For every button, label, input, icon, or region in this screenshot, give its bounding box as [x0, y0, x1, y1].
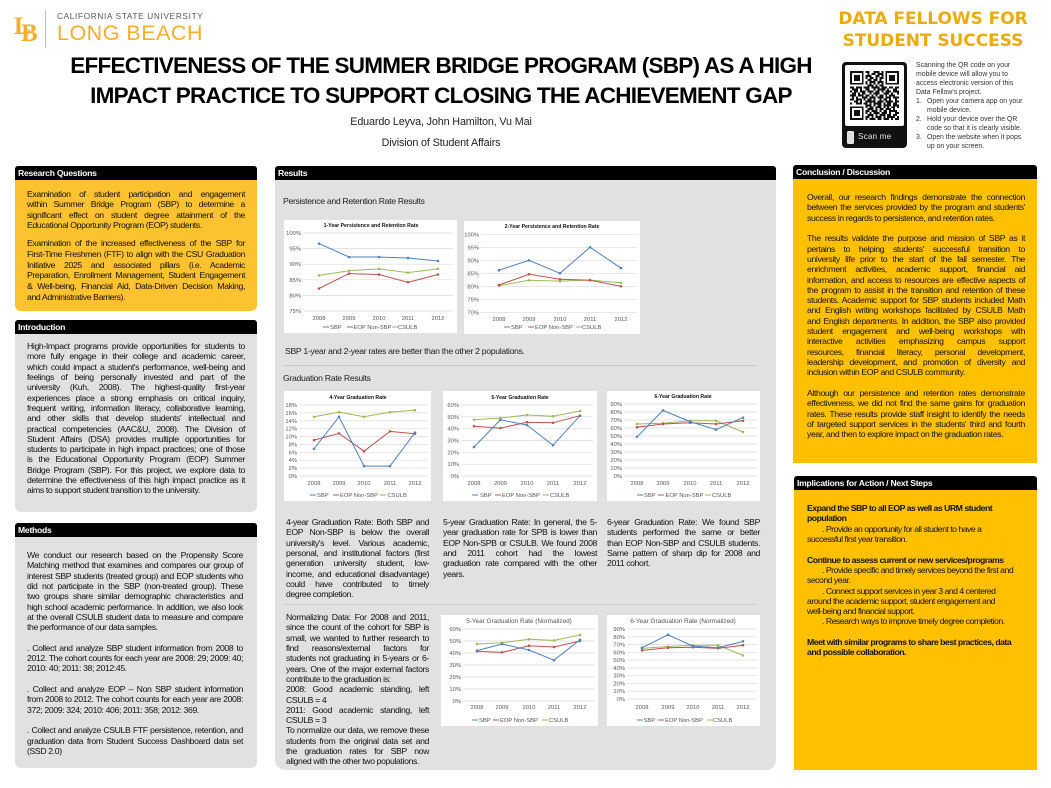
chart: 4-year graduation rate: 18% — [285, 403, 297, 409]
heading: conclusion: Conclusion / Discussion — [796, 167, 890, 177]
chart: 5-year graduation rate: 5-Year Graduation Rate — [491, 395, 549, 401]
chart: 1-year persistence and retention rate: SBP — [330, 325, 342, 331]
chart: 5-year graduation rate normalized: 2011 — [548, 705, 560, 711]
heading: implications — [794, 476, 1037, 490]
heading: introduction — [15, 320, 257, 334]
text: implications body: Continue to assess current or new services/programs — [807, 555, 1004, 565]
chart: 5-year graduation rate normalized — [441, 615, 598, 726]
text: methods body: 2010: 40; 2011: 38; 2012:45. — [27, 663, 127, 673]
text: introduction body: Student Affairs (DSA) provides multiple opportunities for — [27, 434, 245, 444]
chart: 4-year graduation rate: EOP Non-SBP — [340, 493, 378, 499]
text: conclusion body: university life prior to the start of the fall semester. The — [807, 254, 1025, 264]
division: Division of Student Affairs — [382, 137, 500, 149]
chart: 2-year persistence and retention rate: 70% — [467, 310, 479, 316]
chart: 5-year graduation rate: CSULB — [550, 493, 569, 499]
text: research question two: Examination of the increased effectiveness of the SBP for — [27, 238, 245, 248]
chart: 6-year graduation rate normalized: SBP — [644, 718, 655, 724]
text: normalizing data: To normalize our data, we remove these — [286, 725, 429, 735]
text: 4-year graduation finding — [286, 517, 430, 599]
chart: 4-year graduation rate: 12% — [285, 427, 297, 433]
chart: 6-year graduation rate: 2011 — [710, 481, 722, 487]
chart: 6-year graduation rate: 30% — [610, 450, 622, 456]
chart: 5-year graduation rate normalized: 40% — [449, 651, 461, 657]
text: conclusion body: rates. These results provide staff insight to identify the needs — [807, 409, 1025, 419]
text: normalizing data: since the count of the cohort for SBP is — [286, 622, 429, 632]
text: normalizing data: 2008: Good academic standing, left — [286, 684, 429, 694]
chart: 6-year graduation rate: 50% — [610, 434, 622, 440]
text: methods body: . Collect and analyze SBP student information from 2008 to — [27, 643, 243, 653]
text: implications body: Expand the SBP to all EOP as well as URM student — [807, 503, 992, 513]
text: conclusion body: between the services provided by the program and students' — [807, 202, 1025, 212]
chart: 1-year persistence and retention rate: CSULB — [398, 325, 417, 331]
heading: introduction: Introduction — [18, 322, 65, 332]
chart: 5-year graduation rate normalized: 2010 — [523, 705, 535, 711]
text: conclusion body: interactive activities emphasizing campus support — [807, 336, 1025, 346]
chart: 4-year graduation rate: 10% — [285, 435, 297, 441]
QR instructions: Data Fellow's project. — [916, 89, 982, 96]
text: normalizing data: students not graduating in 5-years or 6- — [286, 653, 429, 663]
text: introduction body: is the Educational Opportunity Program (EOP) Summer — [27, 454, 245, 464]
text: introduction body: High-Impact programs provide opportunities for students to — [27, 341, 245, 351]
text: methods body: two groups share similar demographic characteristics and — [27, 591, 243, 601]
chart: 5-year graduation rate normalized: 60% — [449, 627, 461, 633]
text: 4-year graduation finding: 4-year Graduation Rate: Both SBP and — [286, 517, 429, 527]
chart: 1-year persistence and retention rate: 2009 — [343, 316, 355, 322]
chart: 5-year graduation rate: 60% — [447, 403, 459, 409]
text: methods body: We conduct our research based on the Propensity Score — [27, 550, 243, 560]
text: research question two: First-Time Freshmen (FTF) to align with the CSU Graduation — [27, 249, 245, 259]
chart: 4-year graduation rate — [284, 391, 431, 501]
chart: 6-year graduation rate: CSULB — [712, 493, 731, 499]
chart: 5-year graduation rate: 0% — [451, 474, 459, 480]
QR instructions — [916, 62, 1022, 150]
text: implications body: . Research ways to improve timely degree completion. — [822, 616, 1005, 626]
chart: 6-year graduation rate: 90% — [610, 402, 622, 408]
icon: LB monogram — [14, 13, 38, 45]
text: normalizing data: small, we wanted to further research to — [286, 633, 429, 643]
text: 4-year graduation finding: personal, and institutional factors (first — [286, 548, 429, 558]
panel: results — [275, 166, 776, 770]
text: research question two: Initiative 2025 and associated pillars (i.e. Academic — [27, 260, 245, 270]
chart: 4-year graduation rate: 0% — [289, 474, 297, 480]
chart: 4-year graduation rate: 14% — [285, 419, 297, 425]
heading: results: Results — [278, 168, 307, 178]
text: conclusion body: effectiveness, we did not find the same gains for graduation — [807, 398, 1025, 408]
title: EFFECTIVENESS OF THE SUMMER BRIDGE PROGRAM (SBP) AS A HIGH — [70, 53, 812, 78]
panel: introduction — [15, 320, 257, 512]
chart: 5-year graduation rate normalized: CSULB — [549, 718, 568, 724]
text: introduction body: experiences place a strong emphasis on critical inquiry, — [27, 393, 245, 403]
text: normalizing data: aligned with the other two populations. — [286, 756, 419, 766]
text: methods body: from 2008 to 2012. The cohort counts for each year are 2008: — [27, 694, 243, 704]
text: persistence finding: SBP 1-year and 2-year rates are better than the other 2 populations. — [285, 346, 525, 356]
chart: 4-year graduation rate: 2011 — [384, 481, 396, 487]
text: conclusion body: inclusion within EOP and CSULB community. — [807, 367, 965, 377]
text: introduction body: university (Kuh, 2008). The highest-quality first-year — [27, 382, 245, 392]
text: conclusion body: students. Academic support for SBP students included Math — [807, 295, 1025, 305]
chart: 2-year persistence and retention rate: EOP Non-SBP — [535, 325, 573, 331]
chart: 5-year graduation rate normalized: 20% — [449, 675, 461, 681]
heading: conclusion — [793, 165, 1037, 179]
chart: 4-year graduation rate: 4% — [289, 458, 297, 464]
text: 6-year graduation finding: 2011 cohort. — [607, 558, 650, 568]
chart: 5-year graduation rate normalized: SBP — [479, 718, 491, 724]
chart: 4-year graduation rate: 2010 — [358, 481, 370, 487]
program heading: Data Fellows for Student Success: DATA FELLOWS FOR — [838, 9, 1028, 29]
chart: 6-year graduation rate normalized: 2008 — [636, 705, 648, 711]
chart: 4-year graduation rate: 16% — [285, 411, 297, 417]
university name: CALIFORNIA STATE UNIVERSITY — [57, 12, 203, 21]
QR instructions: mobile device. — [927, 107, 971, 114]
chart: 2-year persistence and retention rate: 2012 — [615, 317, 627, 323]
chart: 5-year graduation rate: 2011 — [547, 481, 559, 487]
heading: research questions — [15, 166, 257, 180]
chart: 1-year persistence and retention rate: 2012 — [432, 316, 444, 322]
text: conclusion body: resources, financial literacy, personal development, — [807, 347, 1025, 357]
text: 6-year graduation finding: 6-year Graduation Rate: We found SBP — [607, 517, 760, 527]
chart: 6-year graduation rate: 6-Year Graduation Rate — [654, 394, 712, 400]
chart: 1-year persistence and retention rate: EOP Non-SBP — [354, 325, 392, 331]
chart: 6-year graduation rate: 0% — [614, 474, 622, 480]
text: 5-year graduation finding: year graduation rate for SPB is lower than — [443, 527, 597, 537]
text: research question one: Educational Opportunity Program (EOP) students. — [27, 220, 202, 230]
text: conclusion body: and English departments. In addition, the SBP also provided — [807, 316, 1025, 326]
heading: results — [275, 166, 776, 180]
chart: 6-year graduation rate normalized: 2011 — [712, 705, 724, 711]
chart: 4-year graduation rate: SBP — [317, 493, 329, 499]
QR instructions: up on your screen. — [927, 143, 984, 150]
chart: 5-year graduation rate normalized: 2008 — [471, 705, 483, 711]
text: methods body: . Collect and analyze EOP – Non SBP student information — [27, 684, 243, 694]
chart: 6-year graduation rate normalized: 80% — [613, 635, 625, 641]
chart: 6-year graduation rate normalized: CSULB — [713, 718, 732, 724]
chart: 5-year graduation rate normalized: 10% — [449, 687, 461, 693]
text: 4-year graduation finding: generation university student, low- — [286, 558, 429, 568]
chart: 2-year persistence and retention rate: 2-Year Persistence and Retention Rate — [505, 224, 600, 230]
chart: 2-year persistence and retention rate: CSULB — [582, 325, 601, 331]
chart: 2-year persistence and retention rate: SBP — [511, 325, 523, 331]
authors: Eduardo Leyva, John Hamilton, Vu Mai — [350, 116, 532, 128]
text: conclusion body: pertains to helping students' successful transition to — [807, 244, 1025, 254]
text: conclusion body: the program to assist in the transition and retention of these — [807, 285, 1025, 295]
text: research question two: & Well-being, Financial Aid, Data-Driven Decision Making, — [27, 281, 245, 291]
chart: 6-year graduation rate normalized: 0% — [617, 697, 625, 703]
chart: 4-year graduation rate: 2009 — [333, 481, 345, 487]
text: conclusion body: year, and then to explore impact on the graduation rates. — [807, 429, 1003, 439]
chart: 5-year graduation rate normalized: 0% — [453, 699, 461, 705]
QR instructions: 2. — [916, 116, 922, 123]
chart: 6-year graduation rate: 2008 — [631, 481, 643, 487]
subheading: persistence and retention: Persistence and Retention Rate Results — [283, 196, 425, 206]
chart: 5-year graduation rate normalized: 2009 — [496, 705, 508, 711]
text: introduction body: aims to support student transition to the university. — [27, 485, 200, 495]
text: implications body: population — [807, 513, 846, 523]
text: conclusion body: student engagement and well-being workshops with — [807, 326, 1025, 336]
chart: 6-year graduation rate normalized: 20% — [613, 681, 625, 687]
text: methods body: 2012. The cohort counts for each year are 2008: 29; 2009: 40; — [27, 653, 243, 663]
panel: conclusion and discussion — [793, 165, 1037, 463]
chart: 1-year persistence and retention rate: 75% — [289, 309, 301, 315]
chart: 5-year graduation rate: 2012 — [574, 481, 586, 487]
heading: methods — [15, 523, 257, 537]
text: introduction body: practical competencies (AAC&U, 2008). The Division of — [27, 424, 245, 434]
text: implications body: successful first year transition. — [807, 534, 907, 544]
chart: 6-year graduation rate: EOP Non-SBP — [666, 493, 704, 499]
text: 5-year graduation finding: 5-year Graduation Rate: In general, the 5- — [443, 517, 597, 527]
QR instructions: mobile device will allow you to — [916, 71, 1008, 78]
chart: 5-year graduation rate normalized: EOP Non-SBP — [500, 718, 538, 724]
chart: 1-year persistence and retention rate: 95% — [289, 247, 301, 253]
chart: 6-year graduation rate: 2009 — [657, 481, 669, 487]
chart: 6-year graduation rate: 60% — [610, 426, 622, 432]
chart: 4-year graduation rate: 4-Year Graduation Rate — [329, 395, 387, 401]
QR instructions: Open your camera app on your — [927, 98, 1022, 105]
text: conclusion body: success in regards to persistence, and retention rates. — [807, 213, 995, 223]
text: methods body: graduation data from Student Success Dashboard data set — [27, 736, 243, 746]
text: normalizing data: the graduation rates for SBP now — [286, 746, 429, 756]
chart: 6-year graduation rate: 70% — [610, 418, 622, 424]
chart: 6-year graduation rate normalized: 2010 — [687, 705, 699, 711]
text: methods body: . Collect and analyze CSULB FTF persistence, retention, and — [27, 725, 243, 735]
text: conclusion body: Although our persistence and retention rates demonstrate — [807, 388, 1025, 398]
text: 6-year graduation finding: Same pattern of sharp dip for 2008 and — [607, 548, 760, 558]
text: implications body: . Provide specific and timely services beyond the first and — [822, 565, 1013, 575]
text: 4-year graduation finding: university's level. Various academic, — [286, 538, 429, 548]
chart: 5-year graduation rate: EOP Non-SBP — [502, 493, 540, 499]
chart: 5-year graduation rate: 2008 — [468, 481, 480, 487]
text: 6-year graduation finding: than EOP Non-SBP and CSULB students. — [607, 538, 760, 548]
chart: 6-year graduation rate normalized: 60% — [613, 650, 625, 656]
chart: 5-year graduation rate normalized: 50% — [449, 639, 461, 645]
chart: 5-year graduation rate normalized: 5-Year Graduation Rate (Normalized) — [466, 618, 572, 625]
QR instructions: 3. — [916, 134, 922, 141]
text: conclusion body: enrichment activities, academic support, financial aid — [807, 264, 1025, 274]
text: implications body: . Provide an opportunity for all student to have a — [822, 524, 981, 534]
chart: 6-year graduation rate normalized: 6-Year Graduation Rate (Normalized) — [630, 618, 736, 625]
chart: 5-year graduation rate: 10% — [447, 462, 459, 468]
chart: 6-year graduation rate: 80% — [610, 410, 622, 416]
text: methods body: 372; 2009: 324; 2010: 406; 2011: 358; 2012: 369. — [27, 705, 199, 715]
QR instructions: Open the website when it pops — [927, 134, 1021, 141]
text: normalizing data: students from the original data set and — [286, 736, 429, 746]
chart: 1-year persistence and retention rate: 85% — [289, 278, 301, 284]
text: introduction body: determine the effectiveness of this high impact practice as it — [27, 475, 245, 485]
text: 4-year graduation finding: income, and educational disadvantage) — [286, 569, 429, 579]
chart: 1-year persistence and retention rate: 2008 — [313, 316, 325, 322]
chart: 6-year graduation rate normalized: 30% — [613, 674, 625, 680]
chart: 6-year graduation rate normalized: 40% — [613, 666, 625, 672]
text: normalizing data: find reasons/external factors for — [286, 643, 429, 653]
heading: implications: Implications for Action / Next Steps — [797, 478, 932, 488]
panel: methods — [15, 523, 257, 768]
chart: 4-year graduation rate: 2012 — [409, 481, 421, 487]
text: introduction body: feelings of being personally invested and part of the — [27, 372, 245, 382]
text: 4-year graduation finding: could have contributed to timely — [286, 579, 429, 589]
text: 6-year graduation finding: students performed the same or better — [607, 527, 760, 537]
text: research question two: Preparation, Enrollment Management, Student Engagement — [27, 270, 245, 280]
chart: 1-year persistence and retention rate: 90% — [289, 262, 301, 268]
chart: 5-year graduation rate: SBP — [480, 493, 492, 499]
text: 4-year graduation finding: EOP Non-SBP is below the overall — [286, 527, 429, 537]
chart: 2-year persistence and retention rate: 2009 — [523, 317, 535, 323]
program heading: Data Fellows for Student Success — [838, 9, 1028, 50]
chart: 1-year persistence and retention rate: 100% — [286, 231, 301, 237]
text: introduction body: more fully engage in their college and academic career, — [27, 351, 245, 361]
chart: 2-year persistence and retention rate: 95% — [467, 245, 479, 251]
text: introduction body — [27, 341, 246, 495]
chart: 5-year graduation rate: 50% — [447, 415, 459, 421]
chart: 5-year graduation rate normalized: 2012 — [574, 705, 586, 711]
icon: phone — [847, 131, 854, 144]
text: conclusion body: and English writing workshops facilitated by CSULB Math — [807, 305, 1025, 315]
icon: LB monogram: L — [14, 13, 31, 40]
text: 4-year graduation finding: degree completion. — [286, 589, 353, 599]
text: conclusion body: The results validate the purpose and mission of SBP as it — [807, 233, 1025, 243]
chart: 5-year graduation rate normalized: 30% — [449, 663, 461, 669]
text: implications body: Meet with similar programs to share best practices, data — [807, 637, 1011, 647]
text: introduction body: frequent writing, information literacy, collaborative learning, — [27, 403, 245, 413]
text: conclusion body: information, and access to resources are effective aspects of — [807, 274, 1025, 284]
logo: California State University Long Beach — [14, 10, 203, 48]
chart: 6-year graduation rate normalized — [607, 615, 760, 726]
campus name: LONG BEACH — [57, 21, 203, 45]
text: methods body: did not participate in the SBP (non-treated group). These — [27, 581, 243, 591]
text: normalizing data: CSULB = 3 — [286, 715, 326, 725]
chart: 2-year persistence and retention rate: 80% — [467, 284, 479, 290]
chart: 4-year graduation rate: 2008 — [308, 481, 320, 487]
chart: 6-year graduation rate normalized: 2009 — [662, 705, 674, 711]
QR instructions: code so that it is clearly visible. — [927, 125, 1022, 132]
text: implications body: around the academic support, student engagement and — [807, 596, 995, 606]
text: research question two: and Administrative Barriers). — [27, 292, 125, 302]
text: research question one: significant effect on student degree attainment of the — [27, 210, 245, 220]
chart: 5-year graduation rate: 20% — [447, 450, 459, 456]
title: IMPACT PRACTICE TO SUPPORT CLOSING THE ACHIEVEMENT GAP — [90, 83, 792, 108]
program heading: Data Fellows for Student Success: STUDENT SUCCESS — [843, 30, 1023, 50]
text: research question two — [27, 238, 246, 302]
text: research question one: Examination of student participation and engagement — [27, 189, 245, 199]
chart: 6-year graduation rate: 40% — [610, 442, 622, 448]
chart: 5-year graduation rate — [443, 391, 597, 501]
text: implications body: second year. — [807, 575, 850, 585]
chart: 1-year persistence and retention rate: 2010 — [373, 316, 385, 322]
chart: 2-year persistence and retention rate: 85% — [467, 271, 479, 277]
chart: 6-year graduation rate: 20% — [610, 458, 622, 464]
text: normalizing data: CSULB = 4 — [286, 694, 326, 704]
chart: 6-year graduation rate normalized: 70% — [613, 642, 625, 648]
text: introduction body: and other skills that develop students' intellectual and — [27, 413, 245, 423]
text: conclusion body: leadership development, and promotion of diversity and — [807, 357, 1025, 367]
text: introduction body: which could impact a student's performance, well-being and — [27, 362, 245, 372]
chart: 6-year graduation rate: 2010 — [684, 481, 696, 487]
chart: 2-year persistence and retention rate: 2011 — [584, 317, 596, 323]
icon: QR code tile — [842, 62, 907, 148]
text: 6-year graduation finding — [607, 517, 760, 568]
chart: 6-year graduation rate normalized: EOP Non-SBP — [665, 718, 703, 724]
text: 5-year graduation finding — [443, 517, 598, 579]
chart: 2-year persistence and retention rate: 100% — [464, 232, 479, 238]
text: normalizing data — [286, 612, 430, 766]
text: methods body: at the overall CSULB student data to measure and compare — [27, 612, 243, 622]
chart: 6-year graduation rate normalized: 90% — [613, 627, 625, 633]
chart: 6-year graduation rate: 2012 — [737, 481, 749, 487]
text: conclusion body: Overall, our research findings demonstrate the connection — [807, 192, 1025, 202]
panel: implications for action and next steps — [794, 476, 1037, 770]
text: conclusion body — [807, 192, 1026, 439]
chart: 6-year graduation rate normalized: 50% — [613, 658, 625, 664]
chart: 1-year persistence and retention rate: 80% — [289, 293, 301, 299]
text: introduction body: students to participate in high impact practices; one of those — [27, 444, 245, 454]
text: implications body: . Connect support services in year 3 and 4 centered — [822, 586, 995, 596]
chart: 1-year persistence and retention rate: 1-Year Persistence and Retention Rate — [324, 223, 419, 229]
text: 5-year graduation finding: graduation rate compared with the other — [443, 558, 597, 568]
QR instructions: Scanning the QR code on your — [916, 62, 1010, 69]
subheading: graduation rate: Graduation Rate Results — [283, 373, 371, 383]
text: research question one — [27, 189, 246, 230]
chart: 1-year persistence and retention rate — [284, 220, 457, 333]
chart: 5-year graduation rate: 40% — [447, 427, 459, 433]
text: methods body: Matching method that examines and compares our group of — [27, 560, 243, 570]
text: research question one: within Summer Bridge Program (SBP) to determine a — [27, 199, 245, 209]
text: methods body: interest SBP students (treated group) and EOP students who — [27, 571, 243, 581]
text: methods body: (SSD 2.0) — [27, 746, 62, 756]
chart: 6-year graduation rate: SBP — [644, 493, 656, 499]
chart: 6-year graduation rate: 10% — [610, 466, 622, 472]
panel: research questions — [15, 166, 257, 311]
chart: 2-year persistence and retention rate: 2008 — [493, 317, 505, 323]
text: implications body: and possible collaboration. — [807, 647, 906, 657]
chart: 6-year graduation rate normalized: 10% — [613, 689, 625, 695]
text: conclusion body: of targeted support services in the students' third and fourth — [807, 419, 1025, 429]
chart: 4-year graduation rate: 6% — [289, 450, 297, 456]
text: normalizing data: 2011: Good academic standing, left — [286, 705, 429, 715]
text: normalizing data: years. One of the major external factors — [286, 664, 429, 674]
text: normalizing data: contribute to the graduation is: — [286, 674, 391, 684]
text: implications body — [807, 503, 1014, 657]
chart: 4-year graduation rate: CSULB — [388, 493, 407, 499]
text: methods body: high school academic performance. In addition, we also look — [27, 602, 243, 612]
title — [70, 53, 812, 108]
chart: 2-year persistence and retention rate: 90% — [467, 258, 479, 264]
QR instructions: Hold your device over the QR — [927, 116, 1017, 123]
chart: 6-year graduation rate normalized: 2012 — [737, 705, 749, 711]
heading: research questions: Research Questions — [18, 168, 97, 178]
chart: 1-year persistence and retention rate: 2011 — [402, 316, 414, 322]
heading: methods: Methods — [18, 525, 52, 535]
QR instructions: 1. — [916, 98, 922, 105]
text: methods body: the performance of our data samples. — [27, 622, 158, 632]
chart: 2-year persistence and retention rate — [464, 221, 640, 334]
chart: 5-year graduation rate: 2010 — [521, 481, 533, 487]
text: 5-year graduation finding: and 2011 cohort had the lowest — [443, 548, 597, 558]
text: normalizing data: Normalizing Data: For 2008 and 2011, — [286, 612, 429, 622]
chart: 4-year graduation rate: 8% — [289, 442, 297, 448]
chart: 4-year graduation rate: 2% — [289, 466, 297, 472]
text: 5-year graduation finding: EOP Non-SPB or CSULB. We found 2008 — [443, 538, 597, 548]
text: implications body: well-being and financial support. — [807, 606, 915, 616]
text: methods body — [27, 550, 244, 756]
chart: 5-year graduation rate: 30% — [447, 438, 459, 444]
QR instructions: access electronic version of this — [916, 80, 1013, 87]
scan me label: Scan me — [858, 132, 891, 141]
chart: 2-year persistence and retention rate: 2010 — [554, 317, 566, 323]
chart: 6-year graduation rate — [607, 391, 760, 501]
chart: 5-year graduation rate: 2009 — [494, 481, 507, 487]
text: 5-year graduation finding: years. — [443, 569, 464, 579]
text: introduction body: Bridge Program (SBP). For this project, we explore data to — [27, 465, 245, 475]
chart: 2-year persistence and retention rate: 75% — [467, 297, 479, 303]
